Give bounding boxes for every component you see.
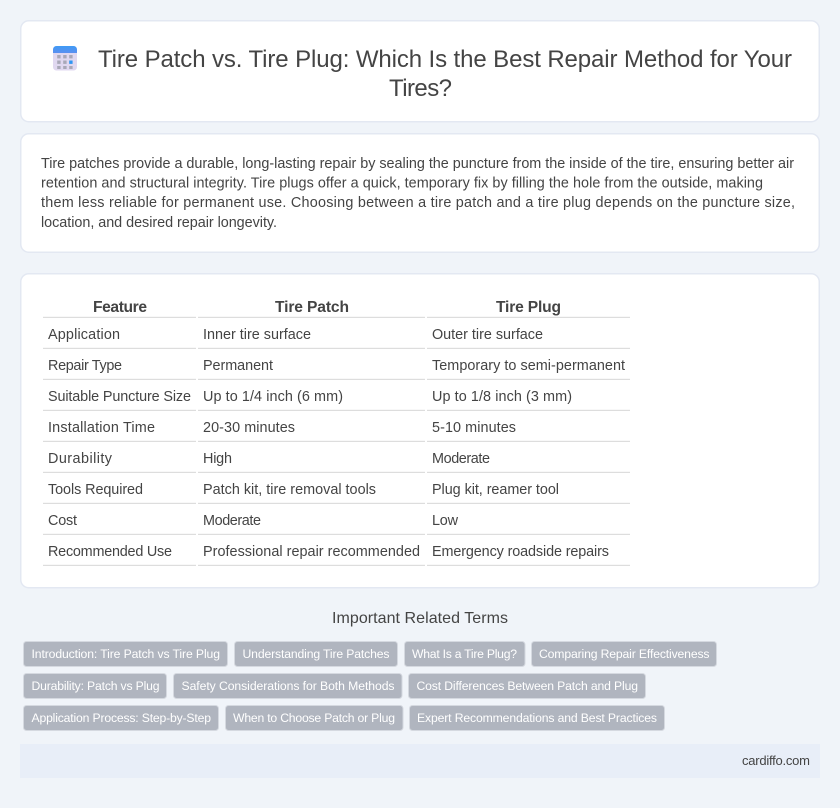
- row: recommended use: Recommended Use: [48, 544, 172, 560]
- row: durability: Durability: [48, 451, 113, 467]
- heading: related terms: Important Related Terms: [332, 610, 508, 627]
- panel: introduction text: Tire patches provide a durable, long-lasting repair by sealing the puncture from the inside of the tire, ensuring better air: [41, 156, 794, 172]
- tag: [24, 642, 228, 666]
- row: application: Inner tire surface: [203, 327, 311, 343]
- tag: [226, 706, 403, 730]
- panel: title card: [21, 21, 819, 122]
- tag: [532, 642, 716, 666]
- tag: [404, 642, 525, 666]
- tag: Durability: Patch vs Plug: [32, 679, 160, 693]
- title: Tire Patch vs. Tire Plug: Which Is the Best Repair Method for Your: [98, 46, 792, 73]
- footer: [20, 744, 820, 778]
- icon: calendar grid: [53, 46, 77, 70]
- tag: What Is a Tire Plug?: [412, 647, 517, 661]
- row: installation time: Installation Time: [48, 420, 155, 436]
- panel: introduction text: retention and structural integrity. Tire plugs offer a quick, temporary fix by filling the hole from the outside, making: [41, 176, 763, 192]
- row: recommended use: [48, 544, 609, 560]
- tag: [234, 642, 398, 666]
- row: repair type: [48, 358, 625, 374]
- tag: Introduction: Tire Patch vs Tire Plug: [32, 647, 220, 661]
- row: recommended use: Professional repair recommended: [203, 544, 420, 560]
- row: durability: High: [203, 451, 232, 467]
- row: durability: Moderate: [432, 451, 490, 467]
- panel: comparison table: [21, 274, 819, 588]
- row: puncture size: Up to 1/8 inch (3 mm): [432, 389, 572, 405]
- row: puncture size: Up to 1/4 inch (6 mm): [203, 389, 343, 405]
- row: tools required: Patch kit, tire removal tools: [203, 482, 376, 498]
- title: [98, 46, 792, 102]
- footer: cardiffo.com: [742, 753, 810, 768]
- tag: Cost Differences Between Patch and Plug: [416, 679, 638, 693]
- row: recommended use: Emergency roadside repairs: [432, 544, 609, 560]
- tag: Safety Considerations for Both Methods: [182, 679, 394, 693]
- panel: introduction text: [21, 134, 819, 252]
- row: cost: Cost: [48, 513, 77, 529]
- row: tools required: [48, 482, 559, 498]
- row: puncture size: Suitable Puncture Size: [48, 389, 191, 405]
- table header: Tire Plug: [496, 299, 561, 316]
- tag: Expert Recommendations and Best Practices: [417, 711, 657, 725]
- row: cost: Low: [432, 513, 459, 529]
- tag: Comparing Repair Effectiveness: [539, 647, 710, 661]
- row: cost: Moderate: [203, 513, 261, 529]
- tag: Understanding Tire Patches: [242, 647, 390, 661]
- row: installation time: 20-30 minutes: [203, 420, 295, 436]
- row: installation time: 5-10 minutes: [432, 420, 516, 436]
- tag: [174, 674, 402, 698]
- row: application: [48, 327, 543, 343]
- tags: related terms: [24, 642, 716, 730]
- row: tools required: Tools Required: [48, 482, 143, 498]
- row: tools required: Plug kit, reamer tool: [432, 482, 559, 498]
- row: cost: [48, 513, 459, 529]
- panel: introduction text: location, and desired repair longevity.: [41, 215, 277, 231]
- row: repair type: Permanent: [203, 358, 273, 374]
- tag: [408, 674, 646, 698]
- row: repair type: Repair Type: [48, 358, 122, 374]
- tag: When to Choose Patch or Plug: [233, 711, 395, 725]
- tag: [24, 706, 218, 730]
- table header: [93, 299, 561, 316]
- row: application: Outer tire surface: [432, 327, 543, 343]
- panel: introduction text: them less reliable for permanent use. Choosing between a tire patch and a tire plug depends on the puncture size,: [41, 195, 795, 211]
- row: installation time: [48, 420, 516, 436]
- title: Tires?: [389, 75, 452, 102]
- table header: Tire Patch: [275, 299, 349, 316]
- row: repair type: Temporary to semi-permanent: [432, 358, 625, 374]
- row: puncture size: [48, 389, 572, 405]
- tag: [24, 674, 166, 698]
- row: durability: [48, 451, 490, 467]
- tag: Application Process: Step-by-Step: [32, 711, 211, 725]
- tag: [410, 706, 664, 730]
- row: application: Application: [48, 327, 120, 343]
- table header: Feature: [93, 299, 147, 316]
